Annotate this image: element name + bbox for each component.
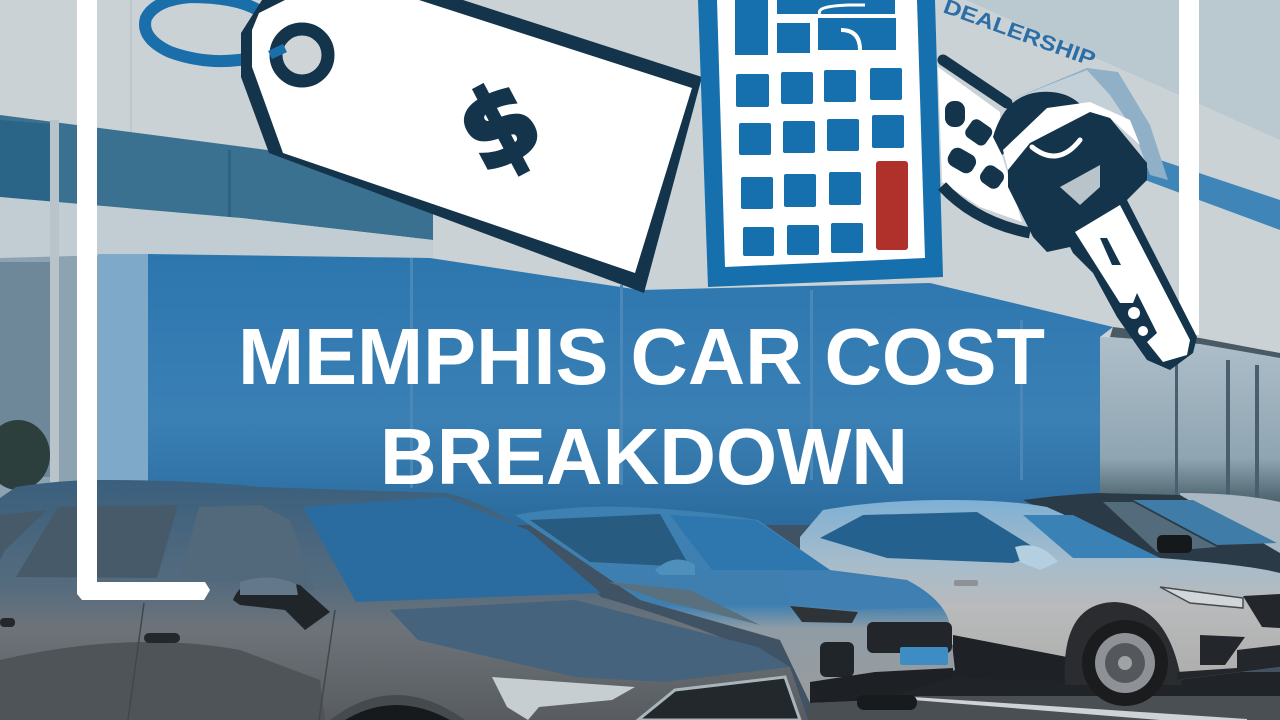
- road: [808, 672, 1280, 720]
- car: foreground SUV: [0, 480, 808, 720]
- icon: price tag with dollar sign: $: [438, 55, 560, 197]
- icon: car key with fob: [938, 60, 1197, 370]
- car: far right dark: [1023, 493, 1280, 580]
- icon: price tag with dollar sign: [145, 0, 702, 293]
- car: middle SUV: [515, 507, 955, 710]
- cars in the lot: [0, 480, 1280, 720]
- icon: calculator: [698, 0, 943, 287]
- title: BREAKDOWN: [380, 412, 908, 501]
- calculator keys: [736, 68, 904, 256]
- calculator screen: [735, 0, 896, 55]
- car: silver right SUV: [800, 500, 1280, 706]
- white frame: [77, 0, 1199, 600]
- title: MEMPHIS CAR COST: [238, 312, 1045, 401]
